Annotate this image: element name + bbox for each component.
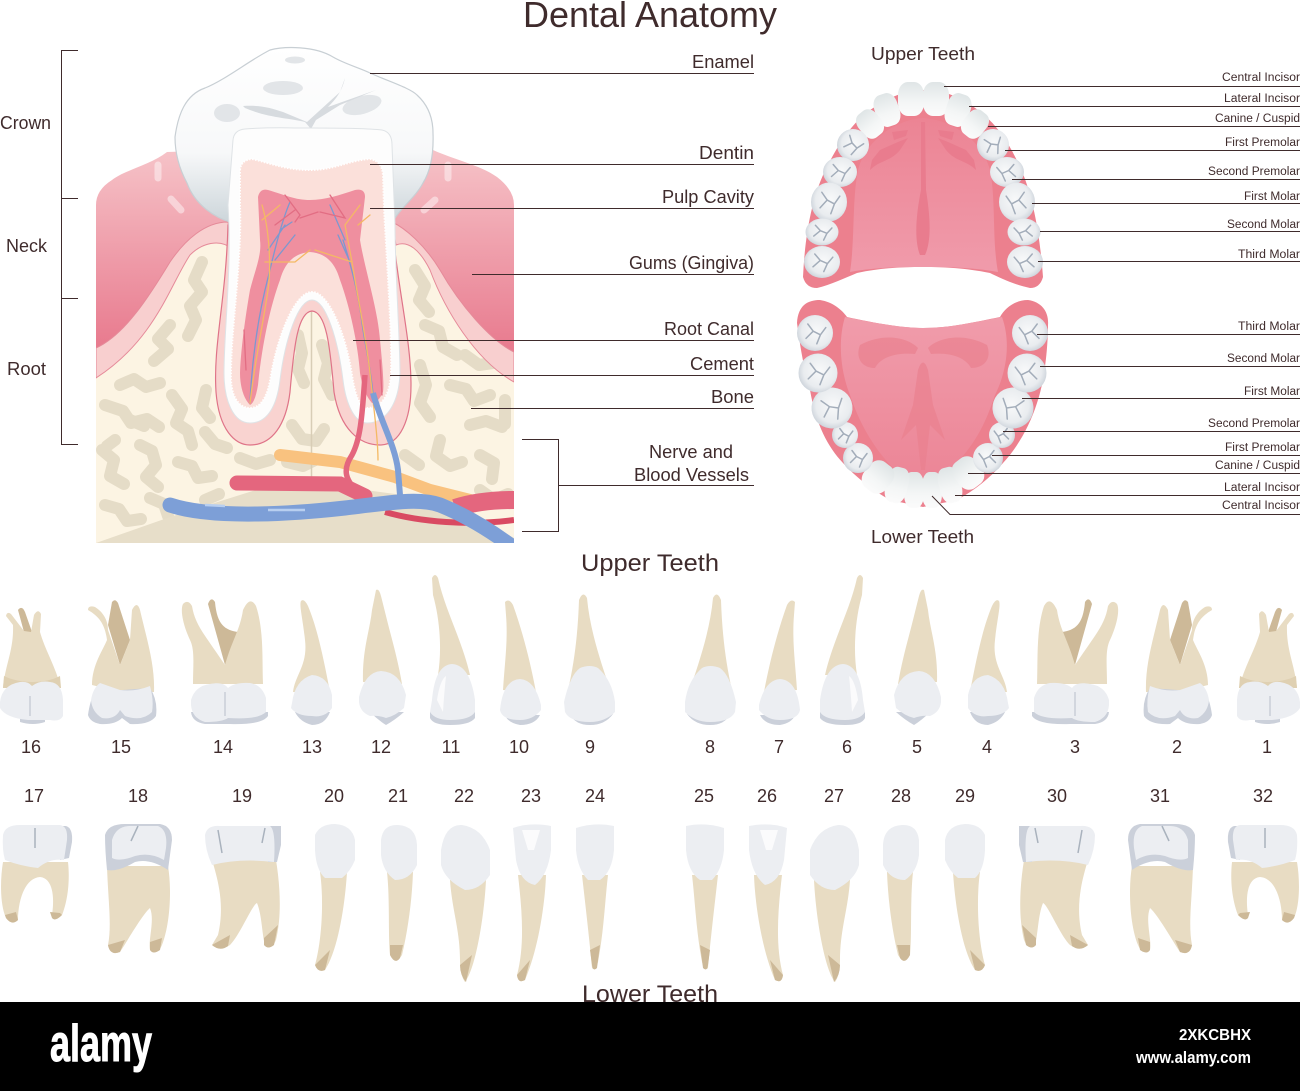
upper tooth 1 xyxy=(1237,608,1300,724)
lower tooth 29 xyxy=(945,824,985,971)
numbers: upper row: 13 xyxy=(302,737,322,757)
numbers: lower row: 30 xyxy=(1047,786,1067,806)
upper tooth 5 xyxy=(894,590,941,725)
lower second molars xyxy=(798,354,1046,392)
gums: right xyxy=(388,150,514,352)
lower tooth 32 xyxy=(1228,825,1299,923)
dentin xyxy=(224,128,400,423)
upper canines xyxy=(852,105,993,143)
upper second premolars xyxy=(823,157,1024,187)
upper tooth 7 xyxy=(759,601,800,725)
labels: upper arch: Second Molar xyxy=(1227,219,1300,231)
lower central incisors xyxy=(904,472,942,508)
palate xyxy=(850,118,998,272)
numbers: upper row: 2 xyxy=(1172,737,1182,757)
upper tooth 12 xyxy=(359,590,406,725)
leader lines: anatomy xyxy=(353,74,754,532)
footer image id: 2XKCBHX xyxy=(1179,1027,1251,1044)
label: enamel: Enamel xyxy=(692,52,754,72)
lower lateral incisors xyxy=(882,465,965,505)
lower tooth 30 xyxy=(1019,826,1095,949)
lower tooth 31 xyxy=(1128,824,1195,953)
dentin inner xyxy=(231,159,391,408)
lower tooth 22 xyxy=(441,825,490,982)
heading: upper teeth row: Upper Teeth xyxy=(581,550,719,577)
labels: upper arch: First Molar xyxy=(1244,191,1300,203)
bone spongy pattern xyxy=(102,262,508,521)
lower tooth 26 xyxy=(749,824,787,981)
numbers: lower row: 18 xyxy=(128,786,148,806)
upper tooth 11 xyxy=(430,575,475,725)
interdental septum line xyxy=(310,310,312,480)
numbers: lower row: 31 xyxy=(1150,786,1170,806)
upper third molars xyxy=(804,246,1043,278)
footer logo: alamy xyxy=(50,1015,152,1073)
lower tooth 19 xyxy=(205,826,281,949)
lower first premolars xyxy=(832,422,1015,448)
numbers: upper row: 9 xyxy=(585,737,595,757)
heading: lower teeth arch: Lower Teeth xyxy=(871,527,974,547)
upper lateral incisors xyxy=(870,91,975,129)
labels: lower arch xyxy=(1208,321,1300,512)
lower tooth 24 xyxy=(576,824,614,969)
upper tooth 6 xyxy=(820,575,865,725)
label: gums: Gums (Gingiva) xyxy=(629,253,754,273)
label: cement: Cement xyxy=(690,354,754,374)
numbers: lower row: 22 xyxy=(454,786,474,806)
upper tooth 2 xyxy=(1144,600,1212,724)
numbers: upper row: 5 xyxy=(912,737,922,757)
labels: upper arch: Central Incisor xyxy=(1222,72,1300,84)
lower tooth 27 xyxy=(810,825,859,982)
lower tooth 28 xyxy=(883,825,919,961)
deep artery xyxy=(385,512,514,523)
lower tooth 20 xyxy=(315,824,355,971)
nerve bundle xyxy=(280,455,470,500)
numbers: upper row: 12 xyxy=(371,737,391,757)
numbers: lower row: 24 xyxy=(585,786,605,806)
labels: lower arch: Central Incisor xyxy=(1222,500,1300,512)
upper tooth 8 xyxy=(685,594,736,725)
label: nerve and blood vessels: Nerve and xyxy=(649,442,733,462)
upper gum xyxy=(803,90,1043,288)
numbers: lower row xyxy=(24,786,1273,806)
labels: upper arch: Second Premolar xyxy=(1208,166,1300,178)
labels: lower arch: Third Molar xyxy=(1238,321,1300,333)
lower third molars xyxy=(797,315,1048,351)
labels: lower arch: First Premolar xyxy=(1225,442,1300,454)
upper first premolars xyxy=(832,124,1014,166)
bone cross-section floor xyxy=(96,488,514,543)
bone xyxy=(96,230,514,543)
upper tooth 9 xyxy=(564,594,615,725)
numbers: upper row: 14 xyxy=(213,737,233,757)
watermark footer bar xyxy=(0,1002,1300,1091)
numbers: upper row: 4 xyxy=(982,737,992,757)
periodontal ligament xyxy=(216,225,411,445)
panel: lower arch xyxy=(797,300,1048,508)
label: dentin: Dentin xyxy=(699,143,754,163)
label: nerve and blood vessels xyxy=(634,442,749,485)
upper tooth 16 xyxy=(0,608,63,724)
lower tooth 17 xyxy=(1,825,72,923)
gums: left xyxy=(96,150,232,348)
frenulum and sublingual folds xyxy=(858,338,989,470)
numbers: lower row: 28 xyxy=(891,786,911,806)
numbers: upper row: 16 xyxy=(21,737,41,757)
label: bone: Bone xyxy=(711,387,754,407)
labels: upper arch: Lateral Incisor xyxy=(1224,93,1300,105)
enamel xyxy=(175,48,433,223)
lower tooth 18 xyxy=(105,824,172,953)
numbers: lower row: 32 xyxy=(1253,786,1273,806)
labels: lower arch: Lateral Incisor xyxy=(1224,482,1300,494)
mouth floor xyxy=(841,317,1007,482)
numbers: lower row: 21 xyxy=(388,786,408,806)
numbers: upper row: 7 xyxy=(774,737,784,757)
lower first molars xyxy=(806,382,1039,434)
lower gum xyxy=(797,300,1048,507)
upper first molars xyxy=(811,182,1035,222)
labels: lower arch: First Molar xyxy=(1244,386,1300,398)
heading: upper teeth arch: Upper Teeth xyxy=(871,44,975,64)
upper central incisors xyxy=(898,82,949,116)
numbers: lower row: 29 xyxy=(955,786,975,806)
vein into tooth xyxy=(373,393,400,495)
artery xyxy=(237,483,365,496)
numbers: upper row: 6 xyxy=(842,737,852,757)
labels: upper arch: Third Molar xyxy=(1238,249,1300,261)
label: root: Root xyxy=(7,359,46,379)
numbers: upper row: 11 xyxy=(442,737,460,757)
label: neck: Neck xyxy=(6,236,48,256)
label: root canal: Root Canal xyxy=(664,319,754,339)
numbers: upper row: 3 xyxy=(1070,737,1080,757)
bracket: crown neck root xyxy=(0,50,78,444)
numbers: lower row: 27 xyxy=(824,786,844,806)
numbers: lower row: 26 xyxy=(757,786,777,806)
lower tooth 23 xyxy=(513,824,551,981)
upper tooth 13 xyxy=(291,600,332,725)
upper second molars xyxy=(806,218,1040,246)
label: nerve and blood vessels: Blood Vessels xyxy=(634,465,749,485)
lower canines xyxy=(857,452,989,498)
labels: upper arch: First Premolar xyxy=(1225,137,1300,149)
upper tooth 3 xyxy=(1032,599,1118,724)
enamel shading and fissure xyxy=(214,56,384,129)
numbers: upper row: 8 xyxy=(705,737,715,757)
numbers: lower row: 19 xyxy=(232,786,252,806)
labels: upper arch: Canine / Cuspid xyxy=(1215,113,1300,125)
label: pulp cavity: Pulp Cavity xyxy=(662,187,754,207)
pulp cavity xyxy=(240,190,383,405)
gum highlights xyxy=(158,165,448,210)
numbers: upper row: 10 xyxy=(509,737,529,757)
heading: lower teeth row: Lower Teeth xyxy=(582,981,718,1008)
lower tooth 21 xyxy=(381,825,417,961)
gum band: left xyxy=(96,222,232,378)
numbers: upper row xyxy=(21,737,1272,757)
labels: lower arch: Second Premolar xyxy=(1208,418,1300,430)
leader lines: arches xyxy=(932,86,1300,514)
gum band: right xyxy=(392,222,514,382)
numbers: upper row: 1 xyxy=(1262,737,1272,757)
vein highlight xyxy=(205,505,305,510)
upper tooth 14 xyxy=(182,599,268,724)
artery right xyxy=(455,500,514,508)
footer site url: www.alamy.com xyxy=(1135,1048,1251,1067)
labels: lower arch: Canine / Cuspid xyxy=(1215,460,1300,472)
numbers: lower row: 17 xyxy=(24,786,44,806)
upper tooth 15 xyxy=(88,600,156,724)
upper tooth 4 xyxy=(968,600,1009,725)
upper tooth 10 xyxy=(500,601,541,725)
lower tooth 25 xyxy=(686,824,724,969)
vein xyxy=(170,501,514,548)
artery into tooth xyxy=(346,375,365,495)
numbers: lower row: 23 xyxy=(521,786,541,806)
numbers: upper row: 15 xyxy=(111,737,131,757)
pulp nerves xyxy=(244,195,382,460)
lower second premolars xyxy=(843,443,1003,473)
labels: upper arch xyxy=(1208,72,1300,261)
label: crown: Crown xyxy=(0,113,51,133)
numbers: lower row: 20 xyxy=(324,786,344,806)
panel: tooth cross-section xyxy=(96,48,514,548)
labels: lower arch: Second Molar xyxy=(1227,353,1300,365)
panel: upper arch xyxy=(803,82,1043,288)
numbers: lower row: 25 xyxy=(694,786,714,806)
palate raphe and rugae xyxy=(870,122,976,255)
